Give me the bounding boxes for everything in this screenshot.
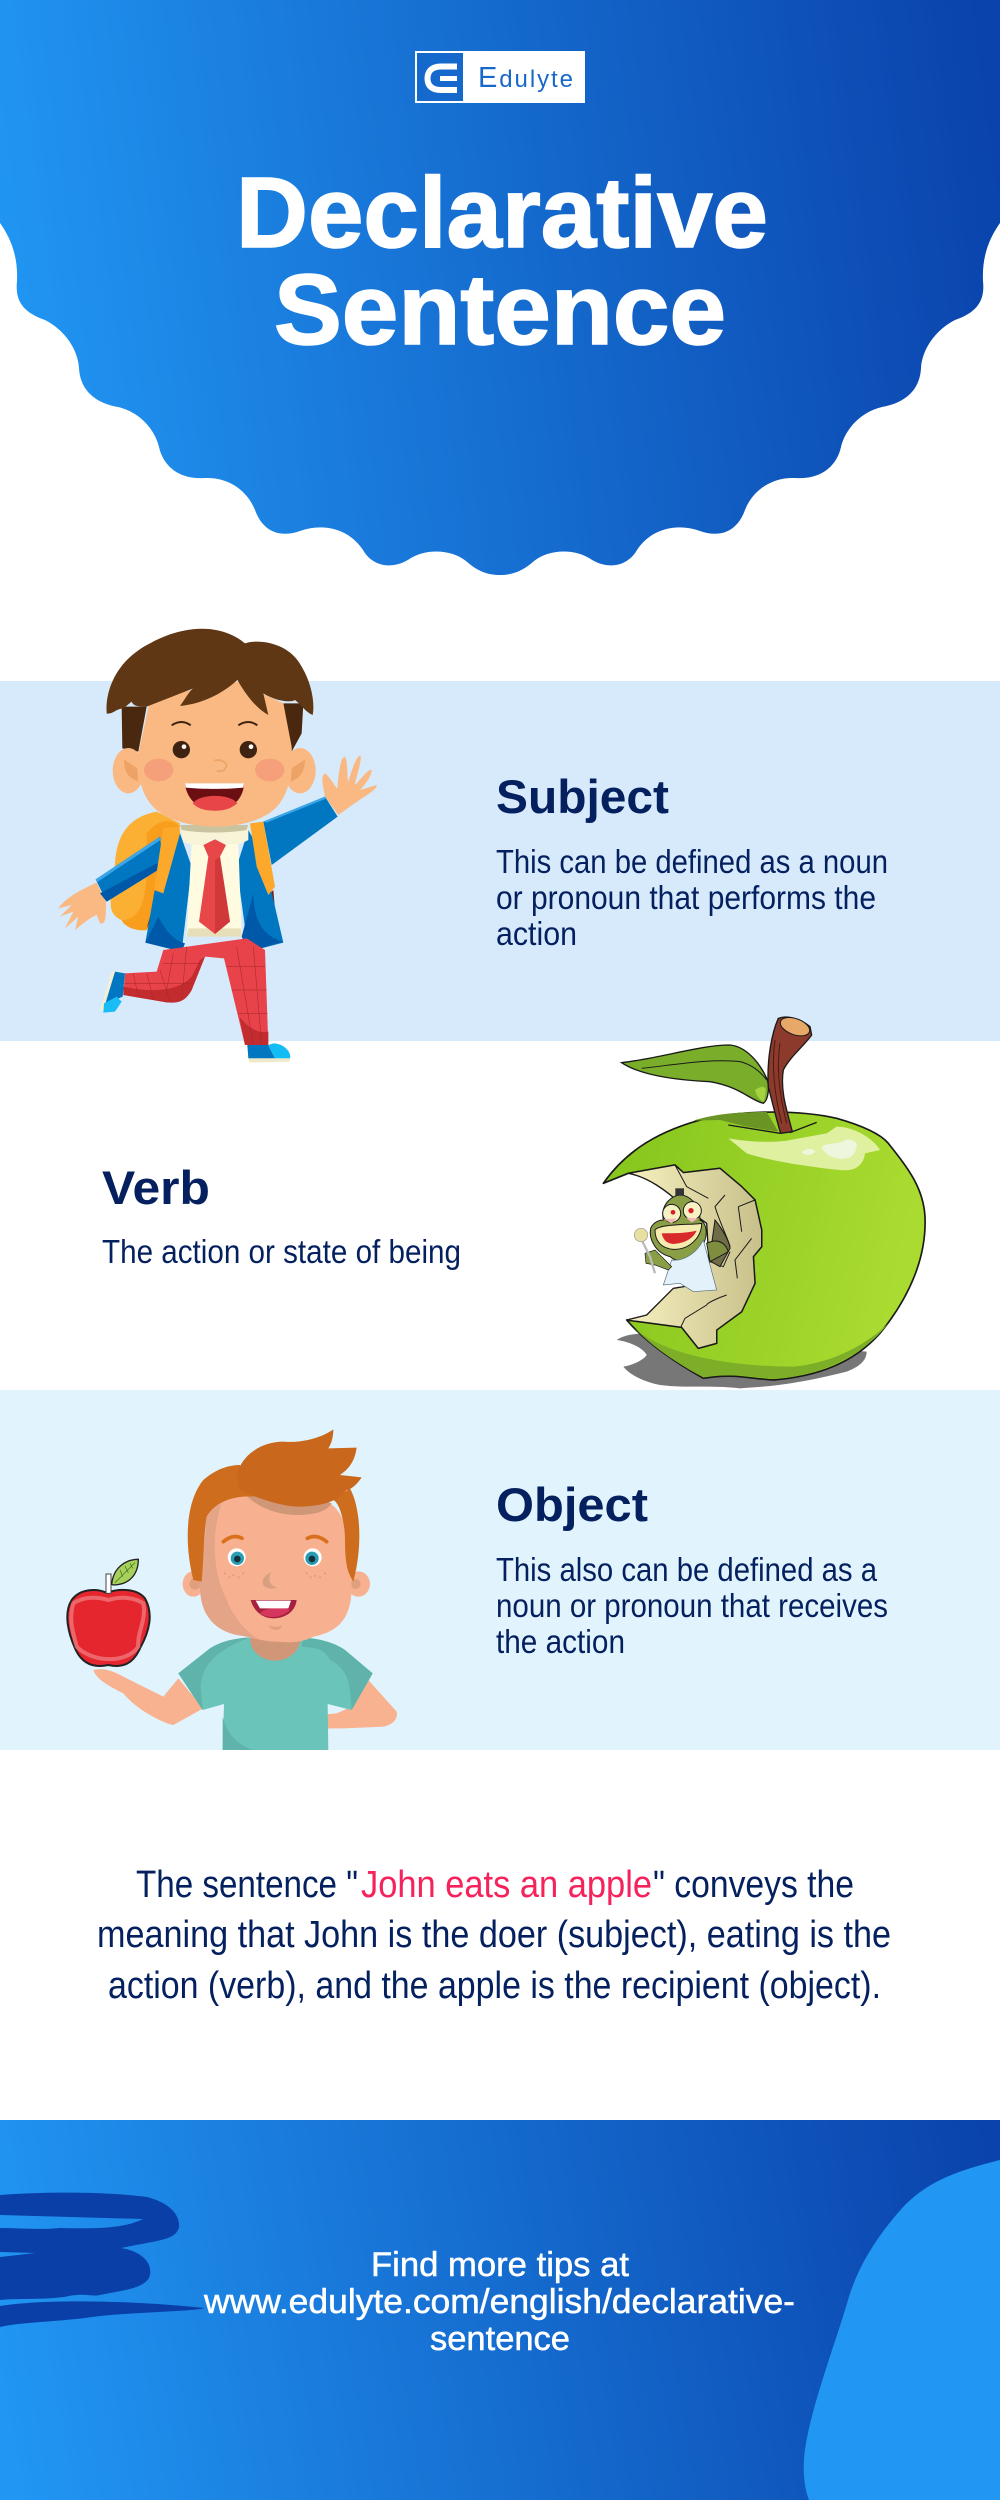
text: example sentence: meaning that John is the doer (subject), eating is the [97, 1914, 891, 1956]
text: subject [496, 770, 888, 952]
panel: subject band [0, 681, 1000, 1041]
text: verb: The action or state of being [102, 1233, 461, 1270]
logo: Edulyte [415, 51, 585, 103]
logo: Edulyte: Edulyte [478, 62, 573, 94]
text: subject: or pronoun that performs the [496, 879, 876, 916]
text: example sentence: " conveys the [653, 1864, 854, 1906]
text: subject: Subject [496, 770, 669, 823]
brush strokes [0, 2193, 204, 2327]
text: object: the action [496, 1623, 625, 1660]
text: example sentence: action (verb), and the apple is the recipient (object). [108, 1965, 881, 2007]
text: verb: Verb [102, 1161, 210, 1214]
panel: object band [0, 1390, 1000, 1750]
text: object: noun or pronoun that receives [496, 1587, 888, 1624]
illustration: boy with backpack [58, 629, 377, 1063]
illustration: green apple with worm [603, 1014, 925, 1388]
call to action text: Find more tips at [371, 2246, 630, 2284]
text: object [496, 1478, 888, 1660]
title: Declarative [236, 157, 768, 269]
call to action text [203, 2246, 795, 2358]
text: example sentence: John eats an apple [361, 1864, 652, 1906]
text: example sentence: The sentence " [136, 1864, 358, 1906]
text: verb [102, 1161, 461, 1270]
decorative blob [804, 2160, 1000, 2500]
call to action text: sentence [430, 2320, 570, 2358]
call to action text: www.edulyte.com/english/declarative- [203, 2283, 795, 2321]
footer panel [0, 2120, 1000, 2500]
text: object: Object [496, 1478, 648, 1531]
text: subject: action [496, 915, 577, 952]
worm character [634, 1188, 728, 1292]
title: Sentence [274, 254, 726, 366]
hero banner [0, 0, 1000, 575]
text: subject: This can be defined as a noun [496, 843, 888, 880]
illustration: boy holding apple [67, 1429, 397, 1750]
title [236, 157, 768, 366]
text: example sentence [97, 1864, 891, 2007]
text: object: This also can be defined as a [496, 1551, 878, 1588]
